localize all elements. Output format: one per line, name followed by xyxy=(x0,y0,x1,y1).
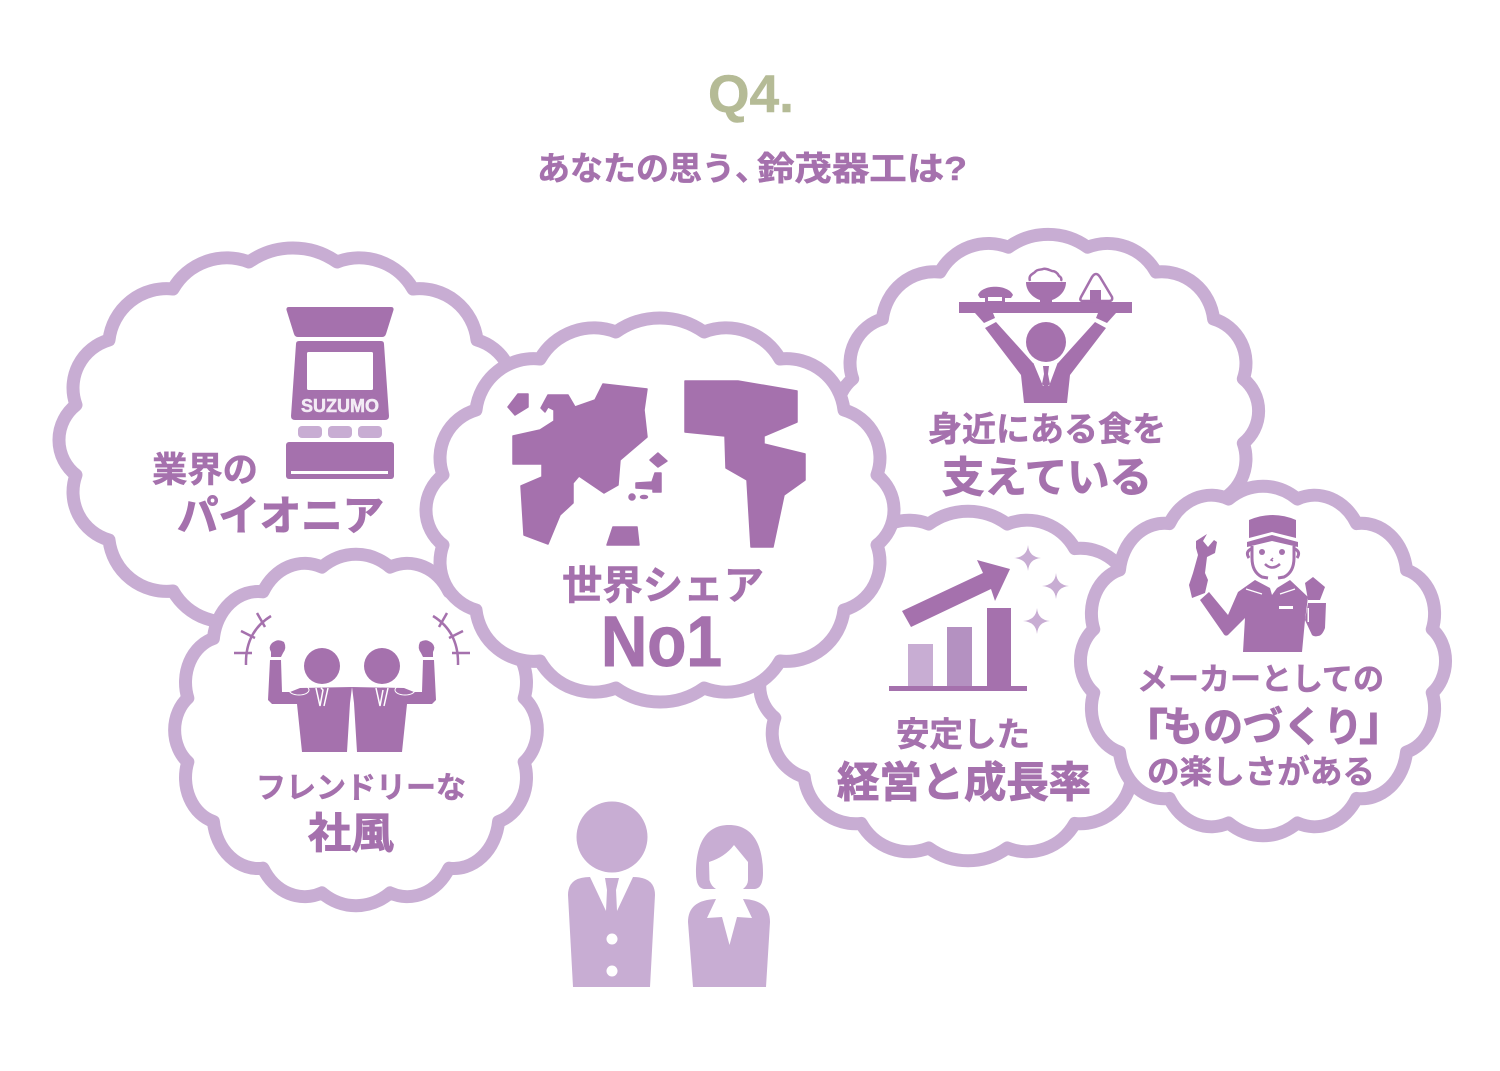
text: supporting familiar food xyxy=(928,411,1166,501)
subtitle question xyxy=(537,150,967,187)
text: friendly culture xyxy=(256,772,466,857)
subtitle question: 、 xyxy=(735,150,768,187)
icon: factory worker with wrench xyxy=(1189,515,1326,652)
text: joy of manufacturing: 「 xyxy=(1120,707,1168,760)
text: joy of manufacturing: 」 xyxy=(1359,697,1407,750)
panel: manufacturing bubble xyxy=(1080,486,1446,836)
text: joy of manufacturing: の楽しさがある xyxy=(1147,753,1375,790)
icon: rising bar chart xyxy=(889,545,1069,691)
text: stable management and growth xyxy=(837,717,1091,806)
icon: rice robot machine: SUZUMO xyxy=(301,396,379,416)
text: pioneer: 業界の xyxy=(152,451,258,490)
title: Q4.: Q4. xyxy=(708,65,794,124)
icon: world map xyxy=(508,381,805,547)
icon: female employee xyxy=(688,825,770,987)
text: joy of manufacturing: ものづくり xyxy=(1163,704,1363,750)
panel: growth bubble xyxy=(760,511,1176,861)
icon: male employee xyxy=(568,802,655,987)
text: friendly culture: 社風 xyxy=(308,810,394,857)
icon: rice robot machine xyxy=(286,307,394,479)
text: friendly culture: フレンドリーな xyxy=(256,772,466,805)
text: supporting familiar food: 身近にある食を xyxy=(928,411,1166,449)
panel: friendly culture bubble xyxy=(175,554,537,906)
text: world share No1: 世界シェア xyxy=(562,564,764,608)
text: stable management and growth: 安定した xyxy=(896,717,1030,754)
panel: world share bubble xyxy=(426,318,894,702)
text: world share No1: No1 xyxy=(601,603,722,682)
icon: person holding tray of food xyxy=(959,269,1132,403)
text: pioneer xyxy=(152,451,384,539)
text: joy of manufacturing: メーカーとしての xyxy=(1137,662,1384,697)
panel: pioneer bubble xyxy=(59,248,527,632)
text: pioneer: パイオニア xyxy=(177,493,384,539)
subtitle question: あなたの思う xyxy=(537,150,735,187)
icon: two cheering people xyxy=(234,613,470,752)
text: supporting familiar food: 支えている xyxy=(942,454,1152,501)
text: joy of manufacturing xyxy=(1120,662,1407,790)
subtitle question: 鈴茂器工は? xyxy=(757,150,967,187)
text: stable management and growth: 経営と成長率 xyxy=(837,759,1091,806)
text: world share No1 xyxy=(562,564,764,682)
panel: food bubble xyxy=(837,234,1259,588)
